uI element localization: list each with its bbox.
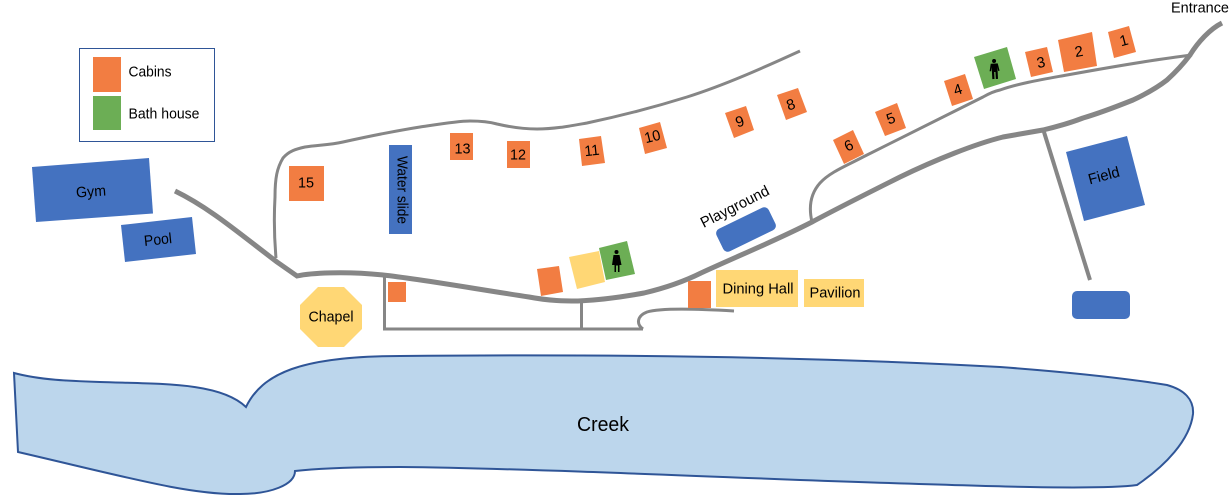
pavilion [804,279,864,307]
cabin 10: 10 [643,127,662,147]
icon: man [989,59,1000,79]
back loop path [274,51,800,258]
playground [698,182,778,253]
cabin 6 [833,130,864,164]
dining hall: Dining Hall [722,280,794,298]
water slide: Water slide [394,156,410,224]
small orange cabin [388,282,406,302]
legend: Bath house [128,106,200,122]
field road [1044,132,1090,280]
orange cabin by dining hall [688,281,711,308]
pool: Pool [143,230,173,250]
cabin 8 [777,88,807,120]
pavilion: Pavilion [810,284,860,302]
cabin 1: 1 [1118,32,1130,50]
cabin 12 [507,141,530,168]
cabin 1 [1108,26,1136,58]
creek [14,355,1193,494]
main road [175,23,1222,301]
cabin 11: 11 [584,142,600,160]
cabin 13 [450,133,473,160]
cabin 11 [579,136,605,166]
cabin 2: 2 [1073,43,1085,61]
cabin 9: 9 [733,113,747,131]
orange cabin by road [537,266,563,296]
cabin 8: 8 [784,96,798,114]
cabin 10 [639,122,667,154]
cabin 15: 15 [298,174,314,192]
chapel: Chapel [308,308,354,326]
lower paths [384,277,734,329]
cabin 4 [944,74,973,106]
gym: Gym [75,182,107,202]
field: Field [1086,164,1122,188]
cabin 12: 12 [510,146,526,164]
cabin 15 [289,166,324,201]
field [1066,136,1145,221]
cabin 5: 5 [884,110,898,128]
pool [121,217,196,262]
icon: woman [612,250,622,272]
upper cabin path [810,55,1192,222]
gym [32,158,153,222]
water slide [389,145,412,234]
women's bath house [599,241,635,280]
legend: Cabins [128,64,172,80]
legend [80,48,214,142]
cabin 3: 3 [1035,54,1047,72]
playground: Playground [698,182,772,232]
cabin 9 [725,106,754,138]
cabin 6: 6 [842,137,856,155]
cabin 2 [1058,32,1097,72]
chapel [300,287,362,347]
creek: Creek [577,414,630,436]
cabin 4: 4 [951,81,965,99]
cabin 5 [875,103,906,136]
entrance label: Entrance [1171,0,1229,16]
dining hall [716,270,798,307]
cabin 3 [1025,47,1053,77]
yellow building [569,251,605,289]
cabin 13: 13 [454,140,470,158]
unlabeled blue building [1072,291,1130,319]
men's bath house [974,47,1016,89]
